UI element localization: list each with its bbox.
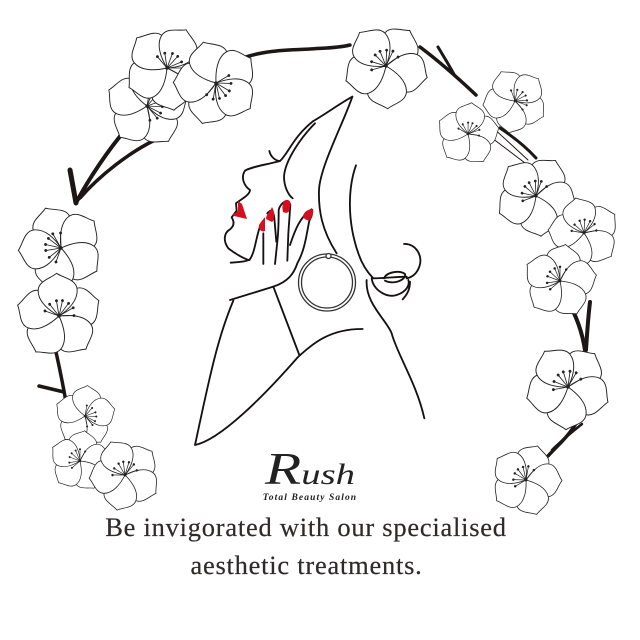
slogan text xyxy=(105,512,507,580)
flower: top left 2 xyxy=(158,24,276,139)
flower: left lower xyxy=(40,371,129,459)
face profile and hair top xyxy=(225,97,352,263)
flower: right upper 1 xyxy=(428,95,505,174)
logo: Rush Total Beauty Salon xyxy=(263,443,357,503)
nail 2 xyxy=(266,207,274,222)
eyelash xyxy=(269,151,280,161)
hoop earring xyxy=(298,254,356,311)
flower: top left 3 xyxy=(86,44,207,164)
nail 3 xyxy=(282,200,291,213)
inner hair line xyxy=(284,123,315,198)
flower: right upper 2 xyxy=(467,53,561,148)
logo tagline: Total Beauty Salon xyxy=(263,493,357,503)
front hair sweep xyxy=(319,97,352,253)
logo script word: R ush xyxy=(264,443,355,494)
flower: bottom left 2 xyxy=(70,422,178,530)
nail 4 xyxy=(303,209,313,220)
flower: right middle 1 xyxy=(476,139,594,256)
nail 1 xyxy=(259,217,265,231)
flower: right lower xyxy=(502,324,631,452)
flower: bottom left 1 xyxy=(41,425,118,499)
flower: top left 1 xyxy=(113,14,217,121)
flower: bottom right xyxy=(476,433,575,530)
flower: right middle 3 xyxy=(513,238,606,327)
lips xyxy=(232,201,247,219)
flower: right middle 2 xyxy=(530,181,635,286)
branches of the wreath xyxy=(39,45,590,456)
flower: left upper xyxy=(2,192,121,308)
hand fingers xyxy=(249,201,312,287)
back line xyxy=(367,280,424,418)
shoulders and neck xyxy=(195,287,363,445)
slogan line 2: aesthetic treatments. xyxy=(190,550,423,580)
red lips and nails xyxy=(232,200,313,231)
flower: top centre xyxy=(321,4,449,131)
slogan line 1: Be invigorated with our specialised xyxy=(105,512,507,542)
woman line portrait xyxy=(195,97,424,445)
back hair sweep and bun xyxy=(350,165,407,278)
flower: left middle xyxy=(0,257,115,376)
